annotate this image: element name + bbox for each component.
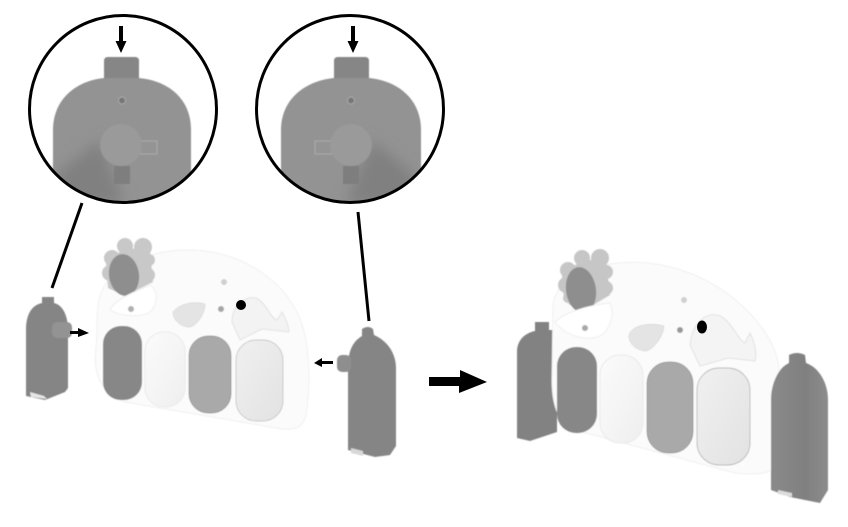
step arrow	[429, 370, 487, 393]
left column assembled	[517, 322, 557, 441]
keyboard panel left	[95, 238, 309, 429]
side slot	[138, 141, 157, 154]
whale	[690, 315, 756, 366]
key 3	[189, 336, 231, 413]
sun face	[563, 265, 599, 315]
cloud star	[582, 325, 588, 331]
shell	[629, 324, 664, 351]
assembled toy	[517, 249, 828, 503]
key 1	[103, 326, 142, 400]
connector tab	[104, 57, 139, 80]
side slot	[315, 141, 334, 154]
callout circle: left connector detail	[30, 16, 216, 215]
cloud	[110, 285, 156, 316]
down arrow	[116, 26, 126, 53]
sun petals	[558, 249, 613, 313]
whale eye left	[236, 300, 246, 310]
knob	[100, 136, 139, 165]
key 1	[557, 347, 597, 433]
down arrow	[348, 26, 358, 53]
right column assembled	[771, 353, 828, 503]
column peg	[52, 322, 72, 338]
connector disc	[53, 78, 191, 215]
sun face	[106, 252, 142, 298]
connector tab	[334, 57, 369, 80]
ring	[256, 16, 444, 202]
soft shading	[52, 145, 122, 200]
right support column	[337, 327, 396, 457]
panel body	[552, 262, 779, 474]
whale	[232, 298, 289, 340]
connector disc	[281, 78, 421, 215]
lower slot	[343, 166, 359, 184]
key 2	[145, 332, 185, 407]
leader line right	[358, 212, 369, 321]
arrow into board right	[314, 358, 333, 367]
column foot gap	[778, 490, 792, 497]
callout circle: right connector detail	[256, 16, 444, 215]
left support column	[26, 297, 72, 400]
sun petals	[102, 238, 155, 296]
key 2	[600, 355, 643, 443]
star	[218, 306, 224, 312]
music note	[221, 279, 227, 285]
screw	[118, 97, 126, 104]
cloud	[555, 303, 612, 338]
arrow into board left	[70, 328, 89, 337]
ring	[30, 16, 216, 202]
whale eye right	[697, 320, 707, 334]
column peg	[337, 355, 351, 372]
star	[677, 327, 683, 333]
key 4	[236, 340, 283, 421]
shell	[173, 303, 205, 327]
screw	[348, 97, 354, 104]
lower slot	[114, 166, 130, 184]
knob	[333, 136, 372, 165]
leader line left	[52, 203, 82, 288]
music note	[681, 297, 687, 303]
key 3	[647, 362, 693, 453]
cloud stars	[128, 306, 134, 312]
key 4	[697, 368, 750, 465]
soft shading	[349, 145, 413, 201]
panel body	[95, 250, 309, 429]
